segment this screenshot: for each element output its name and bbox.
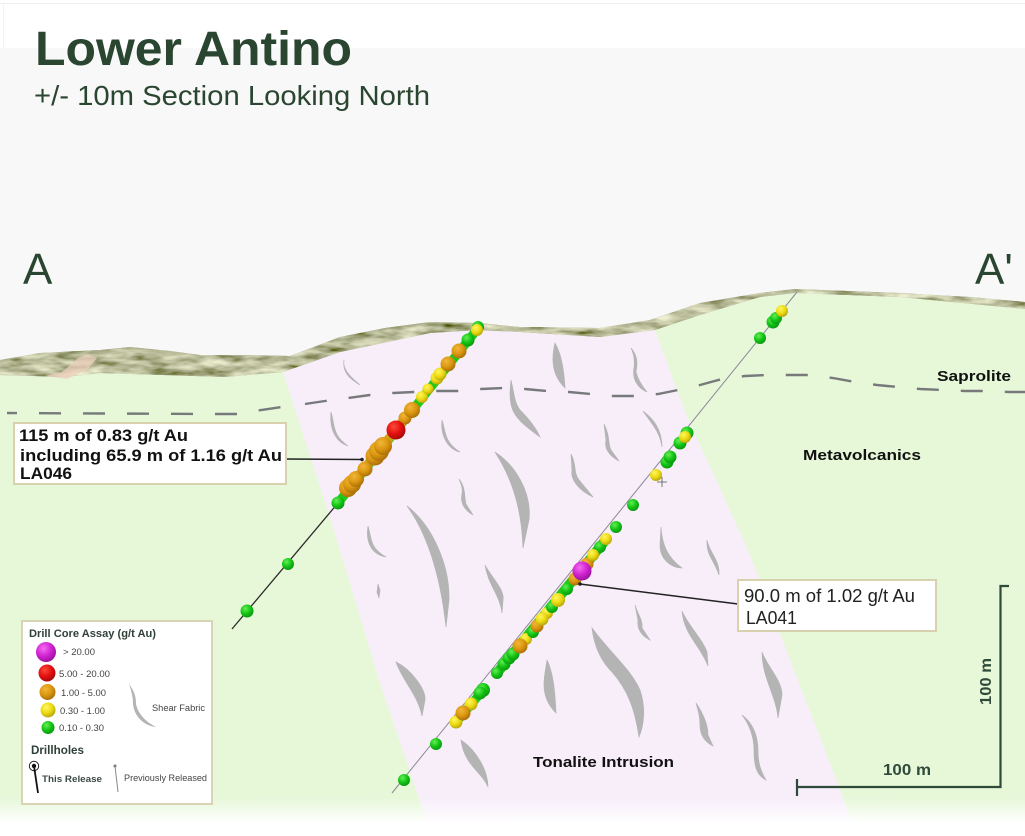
- scale bar: [797, 586, 1009, 796]
- callout: LA041: 90.0 m of 1.02 g/t Au: [744, 586, 915, 606]
- legend: 0.3 to 1: [40, 702, 105, 718]
- title: Lower Antino: [35, 23, 352, 76]
- shear fabric marks: [331, 343, 782, 787]
- label: metavolcanics: Metavolcanics: [803, 447, 921, 464]
- legend: 0.3 to 1: 0.30 - 1.00: [60, 706, 105, 716]
- legend: 5 to 20: [38, 664, 110, 682]
- legend: shear fabric: Shear Fabric: [152, 703, 206, 713]
- terrain surface band: [0, 289, 1025, 379]
- legend: 1 to 5: [40, 684, 106, 700]
- saprolite contact dashed line: [7, 375, 1025, 414]
- legend: this release: This Release: [42, 774, 102, 785]
- subtitle: +/- 10m Section Looking North: [34, 80, 430, 111]
- section marker A: A: [23, 245, 53, 294]
- drillhole LA046: [232, 321, 484, 629]
- drillhole LA041: [392, 292, 797, 793]
- legend: previously released: Previously Released: [124, 773, 207, 783]
- legend: 0.1 to 0.3: 0.10 - 0.30: [59, 723, 104, 733]
- label: tonalite intrusion: Tonalite Intrusion: [533, 754, 674, 771]
- legend heading: drillholes: Drillholes: [31, 745, 84, 757]
- scale bar: 100 m: [883, 762, 931, 779]
- legend: [22, 621, 212, 804]
- legend: this release: [29, 761, 102, 793]
- legend: shear fabric: [129, 684, 206, 727]
- legend: previously released: [114, 764, 207, 792]
- callout: LA046: [14, 423, 364, 484]
- callout: LA046: 115 m of 0.83 g/t Au: [19, 426, 188, 445]
- callout: LA046: including 65.9 m of 1.16 g/t Au: [20, 446, 282, 465]
- legend: 0.1 to 0.3: [42, 721, 104, 734]
- legend: over 20: > 20.00: [63, 647, 95, 657]
- bottom fade: [0, 798, 1025, 836]
- callout: LA046: LA046: [20, 464, 72, 483]
- legend: 5 to 20: 5.00 - 20.00: [59, 669, 110, 679]
- legend: over 20: [36, 642, 95, 662]
- callout: LA041: [578, 580, 936, 631]
- label: saprolite: Saprolite: [937, 368, 1011, 385]
- section marker A prime: A': [975, 245, 1013, 294]
- legend: 1 to 5: 1.00 - 5.00: [61, 688, 106, 698]
- legend heading: assay: Drill Core Assay (g/t Au): [29, 628, 156, 640]
- scale bar: 100 m: [978, 658, 995, 705]
- callout: LA041: LA041: [746, 608, 797, 628]
- panel: tonalite intrusion pink body: [283, 330, 852, 822]
- panel: metavolcanics green ground: [0, 293, 1025, 822]
